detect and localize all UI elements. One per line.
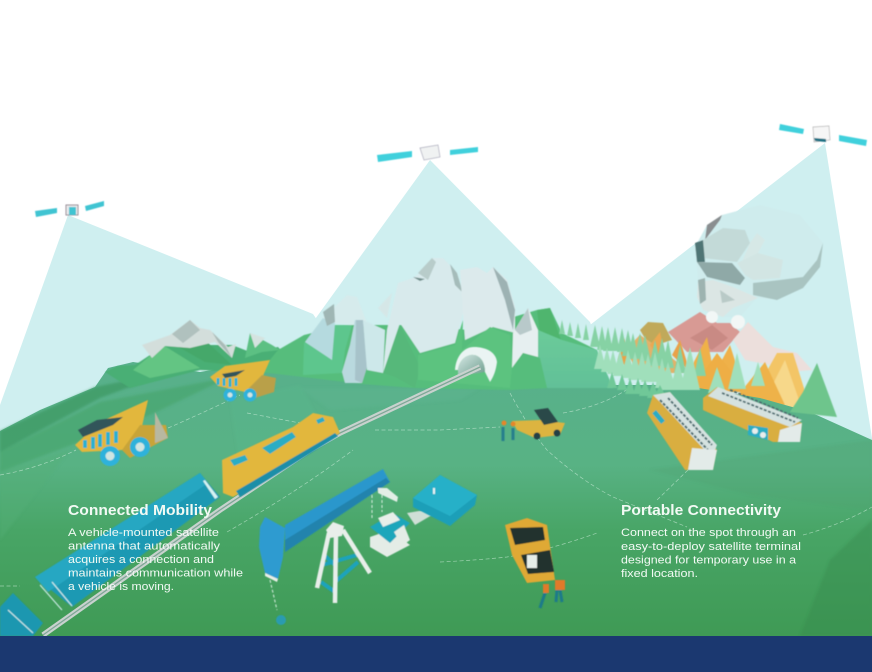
text: connected mobility description: A vehicle-mounted satellite [68, 527, 219, 539]
fire truck: rear [703, 387, 802, 442]
forest fire flames [618, 332, 813, 417]
mining truck: small [210, 360, 276, 402]
portable terminal pickup with crew: lower [505, 518, 565, 608]
satellite coverage beams [0, 143, 872, 445]
train: locomotive [222, 413, 340, 497]
footer band [0, 636, 872, 672]
train: freight cars [0, 473, 220, 636]
text: portable connectivity description [621, 527, 801, 580]
tunnel entrance [455, 347, 497, 382]
heading: Connected Mobility: Connected Mobility [68, 502, 213, 519]
pine trees [559, 320, 837, 417]
ground terrain [0, 360, 872, 636]
satellite: left [35, 201, 104, 217]
satellite: right [779, 124, 867, 146]
oil pump jack [259, 469, 398, 625]
orbit lines on ground [0, 380, 872, 586]
text: portable connectivity description: easy-to-deploy satellite terminal [621, 541, 801, 553]
low-poly ground shading [0, 372, 872, 636]
text: connected mobility description: antenna that automatically [68, 540, 220, 552]
portable terminal jeep with crew: upper [502, 408, 565, 441]
text: connected mobility description: maintains communication while [68, 568, 243, 580]
teal equipment box [413, 475, 477, 526]
left hills [105, 320, 300, 388]
text: connected mobility description: acquires a connection and [68, 554, 214, 566]
text: portable connectivity description: fixed location. [621, 568, 698, 580]
fire truck: foreground [647, 392, 717, 470]
mining truck: large [75, 400, 168, 466]
text: portable connectivity description: designed for temporary use in a [621, 554, 797, 566]
text: connected mobility description [68, 527, 243, 593]
rail track [43, 367, 480, 635]
text: portable connectivity description: Connect on the spot through an [621, 527, 796, 539]
text: connected mobility description: a vehicle is moving. [68, 581, 174, 593]
central mountains [260, 258, 613, 390]
volcanic smoke plume [695, 205, 823, 317]
pump motor [370, 510, 432, 557]
heading: Portable Connectivity: Portable Connectivity [621, 502, 782, 519]
satellite: centre [377, 145, 478, 162]
volcano cone [640, 311, 812, 372]
